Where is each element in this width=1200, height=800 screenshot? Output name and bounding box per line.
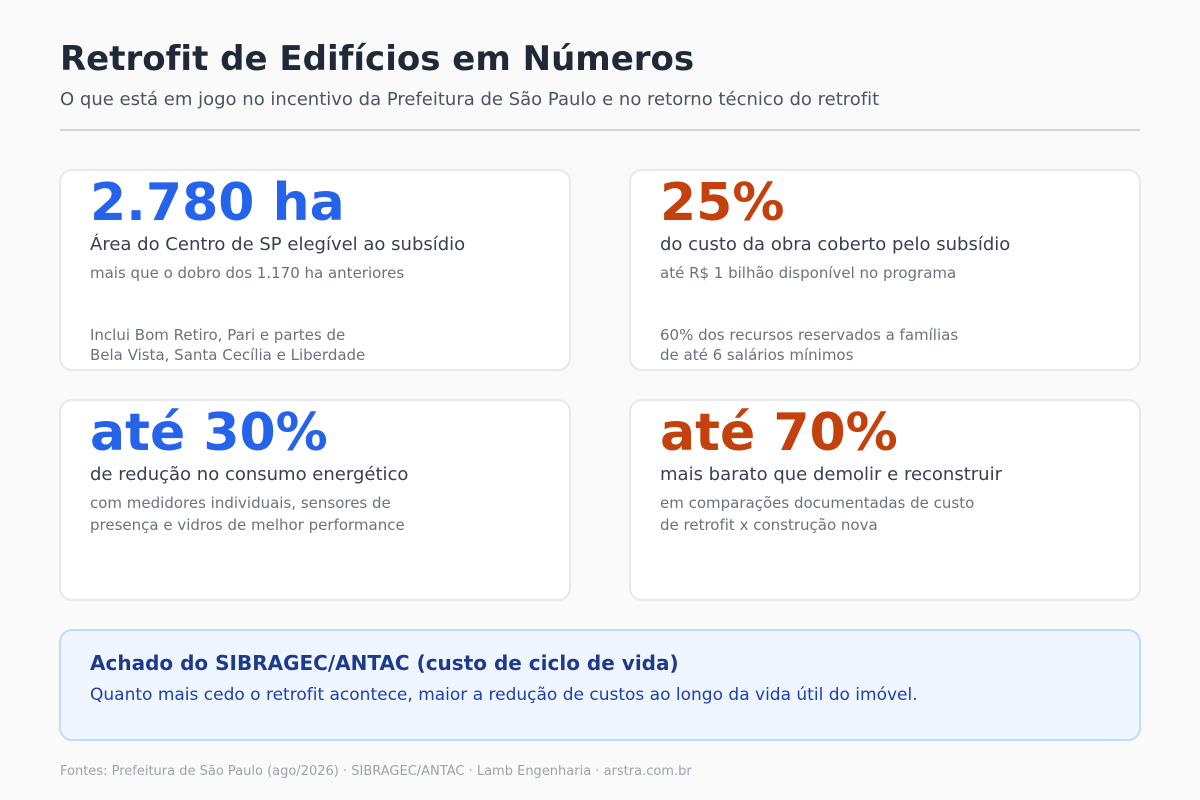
stat: até 70%: até 70% [660,403,898,463]
label: consumo energético: de redução no consumo energético [90,464,408,485]
note: bairros incluídos [90,326,365,364]
label: área elegível: Área do Centro de SP elegível ao subsídio [90,233,465,255]
detail: medidas de eficiência: presença e vidros de melhor performance [90,516,405,534]
detail: medidas de eficiência: com medidores individuais, sensores de [90,494,391,512]
note: reserva para famílias: 60% dos recursos reservados a famílias [660,326,958,344]
detail: comparações documentadas: em comparações documentadas de custo [660,494,974,512]
title: Retrofit de Edifícios em Números [60,39,694,79]
panel: comparação de custo [630,400,1140,600]
note: bairros incluídos: Bela Vista, Santa Cecília e Liberdade [90,346,365,364]
label: mais barato: mais barato que demolir e reconstruir [660,464,1003,485]
detail: comparação de área: mais que o dobro dos 1.170 ha anteriores [90,264,404,282]
subtitle: O que está em jogo no incentivo da Prefeitura de São Paulo e no retorno técnico do retrofit [60,89,879,110]
stat: 2.780 ha: 2.780 ha [90,173,345,233]
note: bairros incluídos: Inclui Bom Retiro, Pari e partes de [90,326,345,344]
panel: custo coberto [630,170,1140,370]
detail: comparações documentadas [660,494,974,534]
stat: 25%: 25% [660,173,784,233]
detail: comparações documentadas: de retrofit x construção nova [660,516,878,534]
note: reserva para famílias [660,326,958,364]
callout heading: Achado do SIBRAGEC/ANTAC (custo de ciclo de vida) [90,651,679,675]
note: reserva para famílias: de até 6 salários mínimos [660,346,854,364]
detail: valor do programa: até R$ 1 bilhão disponível no programa [660,264,956,282]
detail: medidas de eficiência [90,494,405,534]
footer: sources: Fontes: Prefeitura de São Paulo (ago/2026) · SIBRAGEC/ANTAC · Lamb Engenharia · arstra.com.br [60,764,692,779]
stat: até 30%: até 30% [90,403,328,463]
panel: área elegível [60,170,570,370]
panel: redução energética [60,400,570,600]
callout text: Quanto mais cedo o retrofit acontece, maior a redução de custos ao longo da vida útil do imóvel. [90,685,918,705]
callout: achado SIBRAGEC/ANTAC [60,630,1140,740]
label: custo coberto: do custo da obra coberto pelo subsídio [660,234,1010,255]
